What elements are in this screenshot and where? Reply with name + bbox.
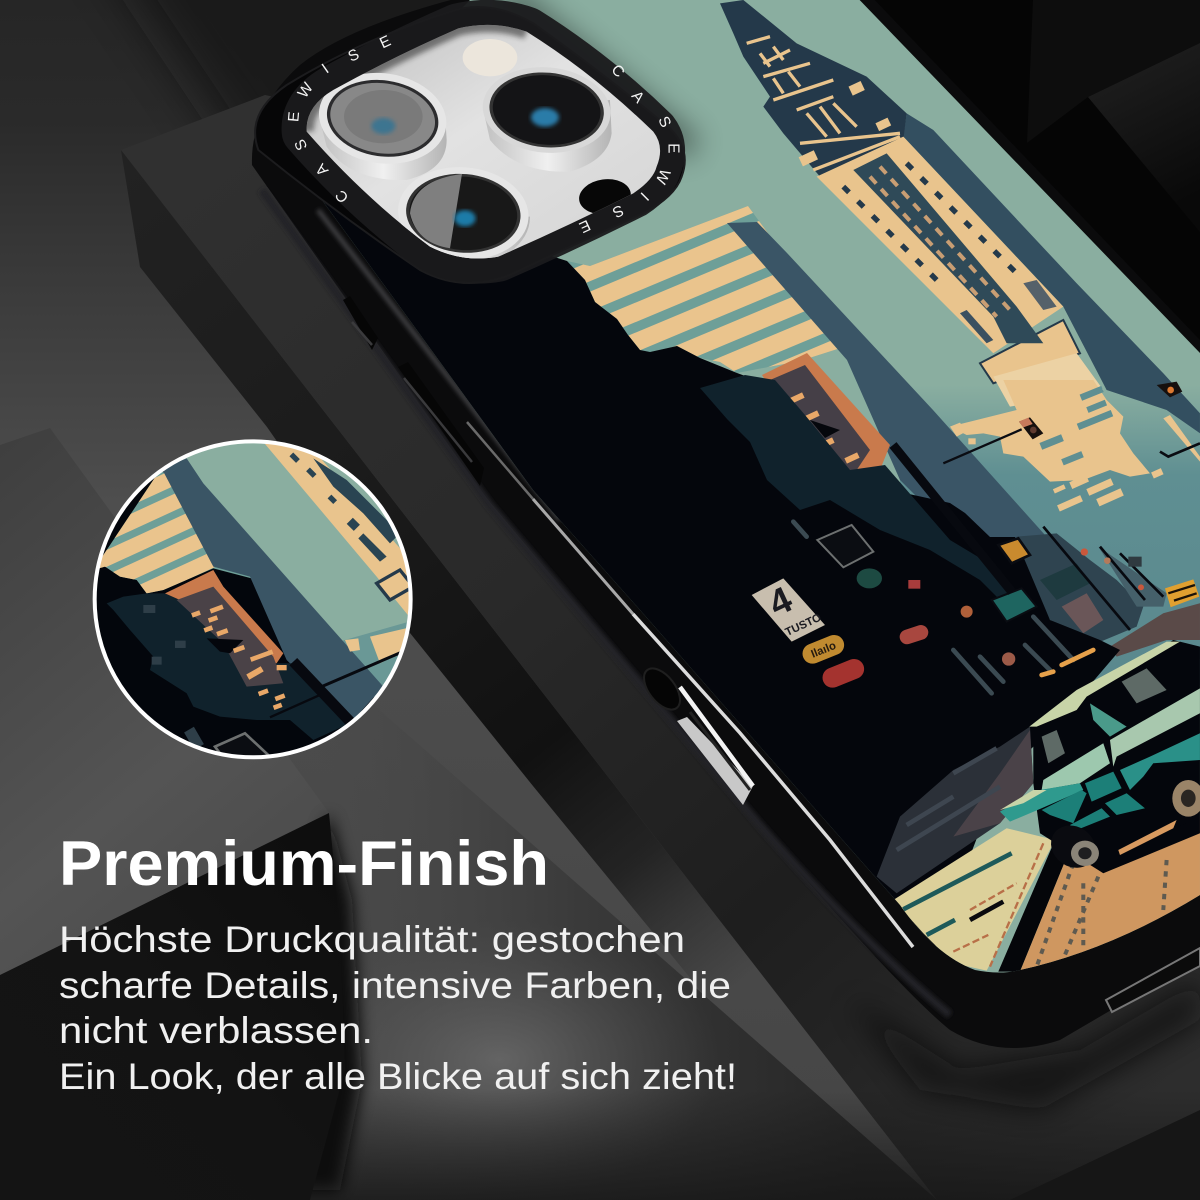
circle dark skyline bbox=[107, 587, 350, 740]
zoom detail circle bbox=[92, 439, 413, 760]
headline: Premium-Finish bbox=[59, 829, 549, 899]
casewise ring text: C bbox=[332, 186, 352, 206]
casewise ring text: E bbox=[576, 216, 593, 236]
camera control button bbox=[637, 662, 687, 716]
casewise ring text: E bbox=[285, 111, 303, 123]
camera island bbox=[255, 7, 685, 283]
casewise ring text: S bbox=[292, 136, 311, 153]
casewise ring text: I bbox=[637, 189, 652, 204]
artwork: tower base and street lights bbox=[943, 380, 1200, 657]
casewise ring text: I bbox=[319, 61, 332, 77]
artwork: orange building bbox=[762, 353, 890, 470]
casewise ring text bbox=[285, 33, 682, 236]
flash bbox=[463, 39, 517, 76]
circle lower right teal bbox=[342, 622, 407, 686]
casewise ring text: E bbox=[377, 33, 394, 52]
circle cream tower bbox=[265, 444, 409, 615]
body text: nicht verblassen. bbox=[59, 1009, 373, 1051]
circle white ring bbox=[95, 441, 411, 757]
side button long bbox=[398, 362, 484, 486]
circle sky bbox=[180, 443, 408, 697]
circle blue tower bbox=[162, 458, 383, 723]
artwork: far buildings bbox=[1017, 533, 1143, 643]
casewise ring text: S bbox=[610, 201, 626, 221]
silver side button bbox=[677, 687, 753, 805]
artwork: black foreground bbox=[323, 202, 1120, 946]
artwork: traffic lights bbox=[1019, 382, 1182, 439]
metal window bbox=[307, 25, 660, 259]
body text: scharfe Details, intensive Farben, die bbox=[59, 964, 731, 1006]
artwork: tower bbox=[720, 0, 1200, 433]
casewise ring text: C bbox=[608, 61, 628, 81]
phone artwork: pixel city bbox=[323, 0, 1200, 972]
lens 2 bbox=[479, 62, 614, 172]
artwork: lower sky bbox=[900, 385, 1200, 685]
artwork: road bbox=[877, 727, 1033, 893]
side button long line bbox=[404, 378, 472, 462]
artwork: street signs: 4 bbox=[762, 578, 799, 624]
circle street pole bbox=[293, 662, 352, 723]
casewise ring text: W bbox=[295, 79, 317, 101]
artwork: street pole bbox=[893, 445, 1012, 592]
artwork: street signs bbox=[752, 525, 1037, 691]
phone case body bbox=[252, 0, 1200, 1048]
casewise ring text: E bbox=[665, 143, 682, 153]
artwork: teal car bbox=[1000, 640, 1200, 876]
circle striped building bbox=[100, 472, 251, 594]
artwork: street signs: Ilaılo bbox=[809, 640, 838, 661]
circle orange building bbox=[165, 570, 283, 663]
casewise ring text: A bbox=[628, 88, 648, 107]
casewise ring text: S bbox=[345, 46, 362, 66]
artwork: street scene and car bbox=[752, 522, 1200, 972]
lens 1 bbox=[319, 72, 447, 180]
artwork: street signs: TUSTO bbox=[784, 612, 823, 639]
window band bbox=[307, 25, 660, 259]
casewise ring text: W bbox=[652, 166, 673, 187]
lens 3 bbox=[401, 174, 530, 258]
side button small line bbox=[352, 322, 372, 345]
island outer ring bbox=[255, 7, 685, 283]
artwork: blue building bbox=[727, 222, 1044, 538]
glass edge highlight bbox=[467, 422, 913, 947]
artwork: dark skyline blocks bbox=[700, 375, 1020, 600]
circle sign bbox=[213, 732, 270, 755]
side button small bbox=[343, 296, 378, 350]
body text bbox=[59, 918, 737, 1097]
phone side gloss bbox=[318, 210, 560, 520]
casewise ring text: A bbox=[312, 159, 332, 179]
camera shadow on artwork bbox=[505, 0, 692, 150]
casewise ring text: S bbox=[654, 114, 674, 130]
body text: Höchste Druckqualität: gestochen bbox=[59, 918, 685, 960]
charging port bbox=[1106, 948, 1200, 1012]
LiDAR sensor bbox=[579, 179, 631, 213]
body text: Ein Look, der alle Blicke auf sich zieht! bbox=[59, 1055, 737, 1097]
artwork: striped building bbox=[568, 206, 838, 373]
window edge shadow bbox=[307, 25, 527, 132]
